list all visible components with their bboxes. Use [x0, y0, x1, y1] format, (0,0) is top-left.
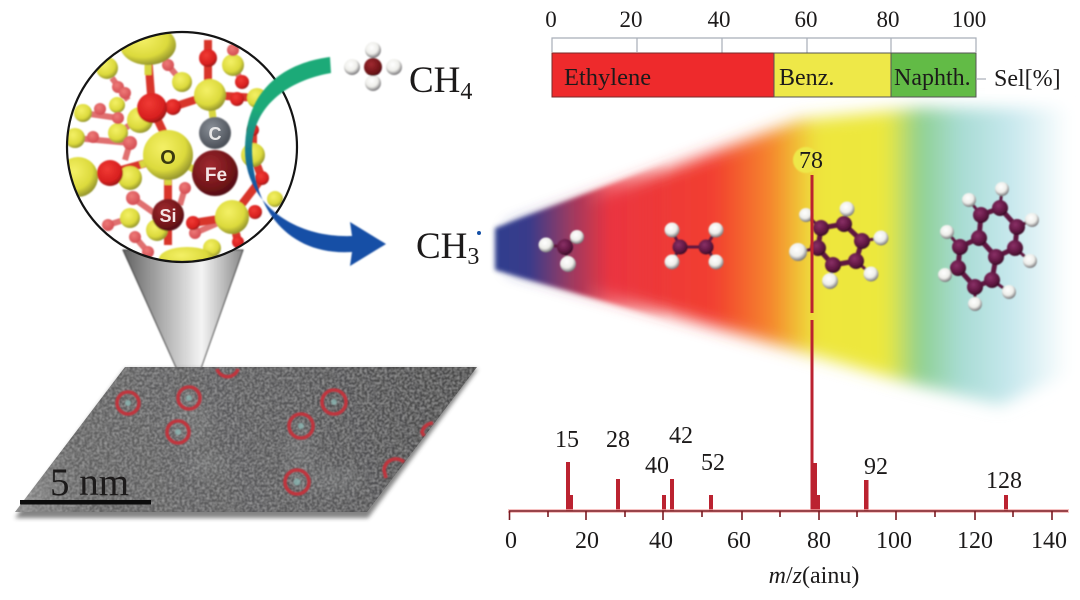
scale bar [20, 500, 151, 504]
axis tick labels [505, 528, 1067, 554]
naphthalene label: Naphth. [894, 65, 971, 91]
TEM image panel [15, 367, 478, 518]
axis label Sel[%] [976, 62, 1063, 94]
selectivity scale: 80 [876, 7, 900, 32]
spectrum peaks [566, 175, 1008, 511]
peak labels [555, 423, 1022, 494]
molecule: ethylene [664, 222, 724, 270]
axis tick labels: 120 [957, 528, 993, 554]
magnifier cone [123, 250, 243, 385]
molecule: methyl [538, 230, 584, 272]
spectrum cone gradient [495, 108, 1065, 405]
x axis [508, 509, 1069, 520]
selectivity scale [545, 7, 986, 55]
icon: methane molecule [344, 42, 402, 91]
benzene label: Benz. [779, 65, 834, 91]
peak labels: 40 [645, 453, 669, 479]
peak labels: 128 [986, 468, 1022, 494]
atom label O: O [160, 147, 176, 169]
axis tick labels: 20 [575, 528, 599, 554]
zoomed atomic structure lens [58, 25, 297, 271]
x axis title: m/z(ainu) [769, 563, 859, 589]
axis tick labels: 40 [649, 528, 673, 554]
red site markers [117, 369, 433, 494]
axis tick labels: 60 [727, 528, 751, 554]
curved arrow from CH4 to CH3 [245, 57, 386, 266]
axis tick labels: 0 [505, 528, 517, 554]
axis label Sel[%]: Sel[%] [994, 66, 1061, 92]
atom label Fe: Fe [205, 165, 227, 186]
selectivity scale: 20 [620, 7, 642, 32]
selectivity scale: 40 [708, 7, 730, 32]
scale label: 5 nm [50, 461, 129, 504]
peak labels: 52 [701, 450, 725, 476]
label CH4: 4 [460, 79, 472, 105]
molecule: naphthalene [938, 182, 1039, 311]
peak labels: 92 [864, 454, 888, 480]
selectivity stacked bar [552, 53, 976, 97]
axis tick labels: 140 [1031, 528, 1067, 554]
peak labels: 28 [606, 427, 630, 453]
atom label C: C [208, 124, 222, 144]
selectivity scale: 60 [794, 7, 818, 32]
mass spectrum chart [505, 147, 1069, 589]
label CH3 radical: 3 [467, 244, 479, 270]
axis tick labels: 80 [807, 528, 831, 554]
selectivity scale: 100 [952, 7, 986, 32]
axis tick labels: 100 [876, 528, 912, 554]
selectivity scale: 0 [545, 7, 557, 32]
molecule: benzene [789, 202, 888, 289]
label CH4: CH [409, 60, 460, 101]
peak labels: 15 [555, 427, 579, 453]
peak labels: 42 [669, 423, 693, 449]
label CH3 radical: CH [416, 226, 467, 267]
ethylene label: Ethylene [564, 64, 651, 91]
peak 78 label: 78 [799, 148, 823, 174]
atom label Si: Si [159, 206, 177, 226]
bright atom dots [125, 395, 337, 486]
